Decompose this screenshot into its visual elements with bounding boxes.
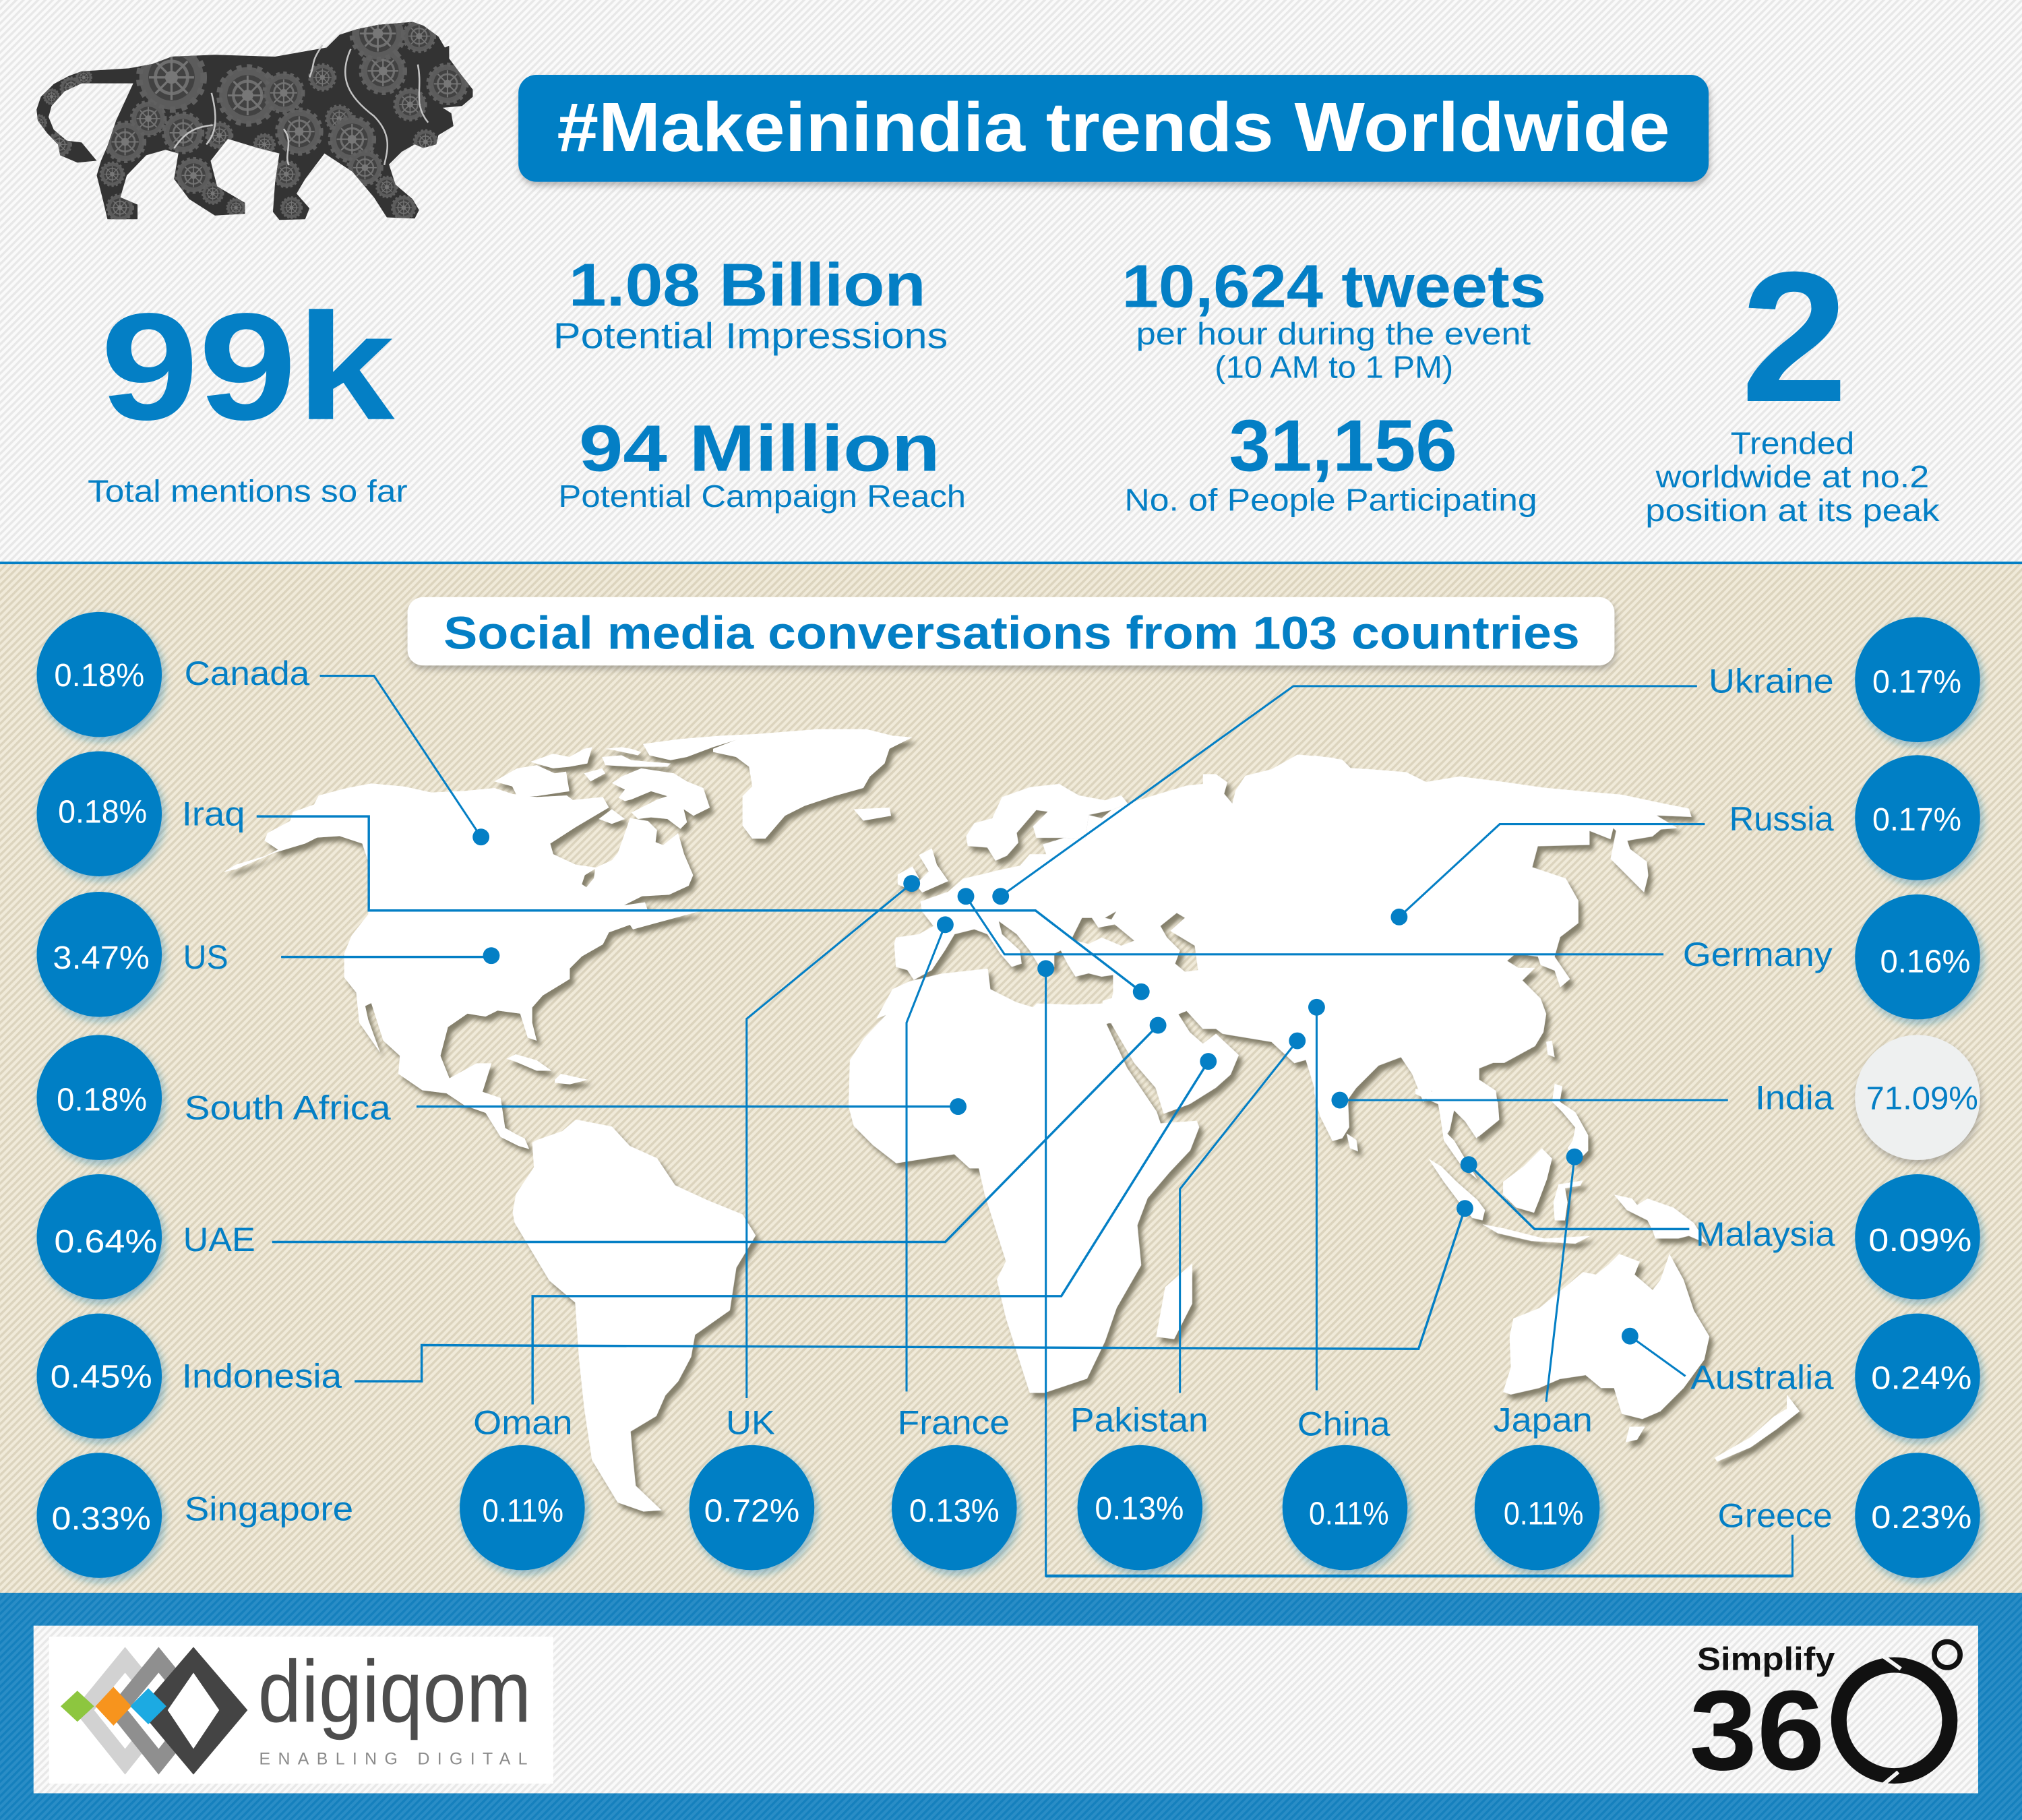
UK value and label: 0.72% bbox=[704, 1494, 799, 1529]
Indonesia value and label: 0.45% bbox=[51, 1360, 152, 1395]
China value and label: 0.11% bbox=[1309, 1496, 1389, 1531]
Indonesia value and label: Indonesia bbox=[182, 1358, 342, 1395]
Canada value and label: Canada bbox=[185, 655, 310, 692]
stat: potential impressions: 1.08 Billion bbox=[569, 251, 926, 319]
Russia value and label bbox=[1729, 755, 1980, 880]
South Africa value and label: 0.18% bbox=[57, 1082, 147, 1118]
Australia value and label: 0.24% bbox=[1871, 1361, 1971, 1397]
logo: Simplify 360: Simplify bbox=[1697, 1642, 1835, 1678]
Australia value and label: Australia bbox=[1690, 1359, 1834, 1397]
Malaysia value and label: 0.09% bbox=[1868, 1223, 1971, 1258]
Oman value and label bbox=[460, 1404, 585, 1570]
stat: trended number 2: worldwide at no.2 bbox=[1655, 459, 1929, 494]
Ukraine value and label: Ukraine bbox=[1709, 662, 1834, 700]
stat: potential campaign reach: Potential Campaign Reach bbox=[558, 479, 966, 514]
stat: people participating: No. of People Participating bbox=[1124, 483, 1537, 518]
logo: Simplify 360: 36 bbox=[1689, 1667, 1825, 1794]
Greece value and label: 0.23% bbox=[1871, 1500, 1971, 1536]
footer band bbox=[0, 1593, 2022, 1820]
Ukraine value and label bbox=[1709, 617, 1980, 742]
South Africa value and label bbox=[37, 1035, 391, 1160]
Greece value and label bbox=[1717, 1453, 1980, 1578]
stat: people participating bbox=[1124, 404, 1537, 518]
stat: tweets per hour bbox=[1122, 253, 1546, 385]
China value and label bbox=[1283, 1405, 1407, 1570]
Indonesia value and label bbox=[37, 1314, 342, 1438]
UK value and label: UK bbox=[726, 1404, 775, 1442]
stat: trended number 2: position at its peak bbox=[1645, 493, 1940, 528]
Oman value and label: Oman bbox=[473, 1404, 572, 1442]
logo: Simplify 360 bbox=[1689, 1642, 1960, 1794]
map section background bbox=[0, 564, 2022, 1594]
Pakistan value and label: Pakistan bbox=[1070, 1401, 1208, 1439]
India value and label bbox=[1755, 1035, 1980, 1160]
stat: potential campaign reach bbox=[558, 411, 966, 514]
Pakistan value and label: 0.13% bbox=[1095, 1491, 1184, 1527]
Japan value and label: 0.11% bbox=[1504, 1496, 1583, 1531]
India value and label: 71.09% bbox=[1866, 1081, 1978, 1116]
stat: 99k total mentions: 99k bbox=[100, 282, 395, 452]
stat: trended number 2: Trended bbox=[1731, 425, 1854, 460]
Greece value and label: Greece bbox=[1717, 1496, 1833, 1534]
stat: trended number 2: 2 bbox=[1741, 234, 1848, 441]
stat: tweets per hour: per hour during the event bbox=[1136, 316, 1531, 351]
Germany value and label: Germany bbox=[1683, 936, 1833, 973]
stat: tweets per hour: 10,624 tweets bbox=[1122, 253, 1546, 320]
stat: 99k total mentions bbox=[88, 282, 408, 508]
map location dots bbox=[472, 828, 1638, 1345]
logo: digiqom: ENABLING DIGITAL bbox=[259, 1749, 528, 1768]
Canada value and label bbox=[37, 612, 310, 737]
Iraq value and label: 0.18% bbox=[58, 795, 147, 830]
top background bbox=[0, 0, 2022, 564]
stat: 99k total mentions: Total mentions so far bbox=[88, 473, 408, 508]
stat: potential campaign reach: 94 Million bbox=[579, 411, 940, 485]
Singapore value and label bbox=[37, 1453, 353, 1578]
stat: tweets per hour: (10 AM to 1 PM) bbox=[1215, 350, 1453, 385]
Japan value and label: Japan bbox=[1494, 1401, 1593, 1439]
world map bbox=[223, 729, 1800, 1511]
stat: trended number 2 bbox=[1645, 234, 1940, 528]
Germany value and label bbox=[1683, 894, 1980, 1019]
Canada value and label: 0.18% bbox=[54, 658, 144, 694]
France value and label bbox=[892, 1404, 1017, 1570]
connector lines bbox=[257, 676, 1792, 1576]
Germany value and label: 0.16% bbox=[1880, 944, 1970, 980]
Malaysia value and label bbox=[1696, 1174, 1980, 1300]
heading pill: social media conversations bbox=[408, 597, 1614, 665]
logo: digiqom bbox=[49, 1637, 553, 1784]
US value and label: 3.47% bbox=[53, 940, 150, 976]
stat: people participating: 31,156 bbox=[1229, 404, 1457, 487]
Russia value and label: Russia bbox=[1729, 800, 1834, 838]
Iraq value and label bbox=[37, 751, 245, 876]
section divider line bbox=[0, 562, 2022, 564]
Japan value and label bbox=[1475, 1401, 1599, 1570]
France value and label: France bbox=[898, 1404, 1010, 1442]
title banner: #Makeinindia trends Worldwide bbox=[557, 88, 1670, 166]
icon: Make in India gear lion bbox=[31, 7, 472, 220]
Ukraine value and label: 0.17% bbox=[1872, 664, 1961, 700]
Iraq value and label: Iraq bbox=[182, 795, 245, 832]
US value and label: US bbox=[183, 938, 228, 976]
title banner bbox=[518, 75, 1709, 182]
Malaysia value and label: Malaysia bbox=[1696, 1215, 1835, 1253]
stat: potential impressions: Potential Impressions bbox=[553, 317, 948, 357]
heading pill: social media conversations: Social media conversations from 103 countries bbox=[443, 607, 1580, 659]
India value and label: India bbox=[1755, 1079, 1834, 1116]
stat: potential impressions bbox=[553, 251, 948, 357]
Oman value and label: 0.11% bbox=[483, 1494, 563, 1529]
US value and label bbox=[37, 892, 228, 1017]
Singapore value and label: Singapore bbox=[185, 1490, 353, 1528]
UAE value and label: 0.64% bbox=[54, 1224, 157, 1260]
France value and label: 0.13% bbox=[909, 1494, 1000, 1529]
Australia value and label bbox=[1690, 1314, 1980, 1438]
South Africa value and label: South Africa bbox=[185, 1089, 391, 1127]
UAE value and label bbox=[37, 1174, 255, 1300]
China value and label: China bbox=[1297, 1405, 1390, 1443]
Pakistan value and label bbox=[1070, 1401, 1208, 1570]
logo: digiqom: digiqom bbox=[258, 1642, 531, 1740]
UAE value and label: UAE bbox=[183, 1221, 255, 1258]
UK value and label bbox=[690, 1404, 814, 1570]
Singapore value and label: 0.33% bbox=[52, 1501, 151, 1537]
Russia value and label: 0.17% bbox=[1872, 802, 1961, 838]
